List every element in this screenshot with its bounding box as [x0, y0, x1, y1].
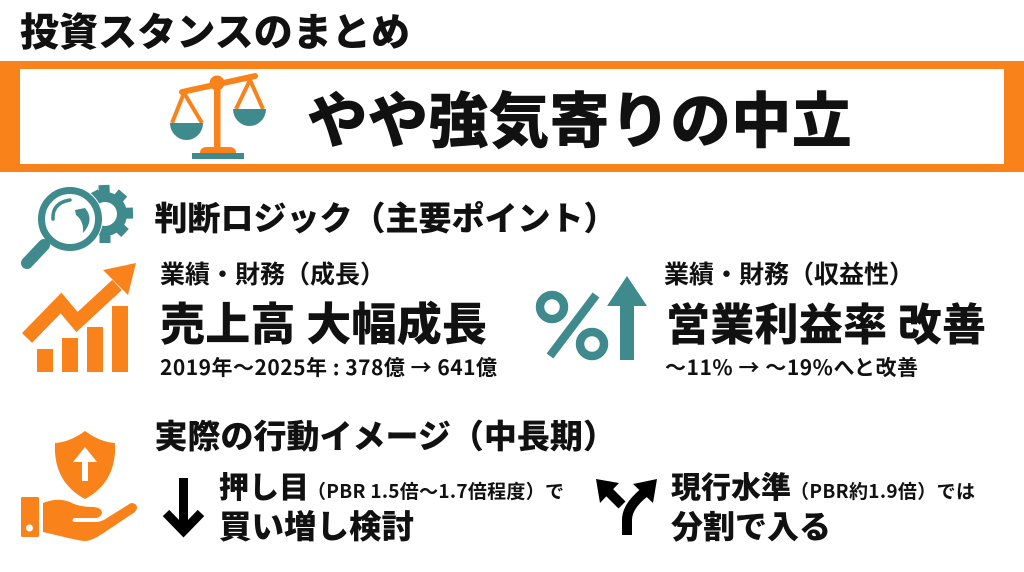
buy text line 1	[219, 463, 564, 507]
growth label: 業績・財務（成長）	[160, 255, 385, 291]
icon: hand holding shield	[21, 431, 137, 541]
panel: profitability	[540, 255, 986, 382]
icon: growth chart	[27, 263, 136, 372]
icon: down arrow	[166, 478, 201, 531]
growth headline: 売上高 大幅成長	[160, 288, 487, 353]
profitability detail: ～11% → ～19%へと改善	[665, 352, 918, 382]
profitability label: 業績・財務（収益性）	[664, 255, 914, 291]
action: split entry	[596, 463, 975, 548]
buy text line 1: （PBR 1.5倍～1.7倍程度）で	[307, 477, 564, 504]
profitability headline: 営業利益率 改善	[666, 289, 986, 353]
icon: forked arrow	[596, 479, 657, 535]
heading: logic: 判断ロジック（主要ポイント）	[154, 192, 616, 240]
buy text line 1: 押し目	[219, 463, 309, 507]
split text line 2: 分割で入る	[671, 502, 831, 548]
split text line 1: 現行水準	[671, 463, 791, 507]
heading: action: 実際の行動イメージ（中長期）	[154, 410, 616, 458]
icon: balance scale	[170, 76, 266, 159]
icon: percent with up arrow	[540, 276, 647, 360]
panel: conclusion banner	[0, 61, 1024, 172]
split text line 1	[671, 463, 975, 507]
banner text: やや強気寄りの中立	[307, 73, 852, 160]
title: 投資スタンスのまとめ	[20, 2, 410, 58]
split text line 1: （PBR約1.9倍）では	[790, 477, 975, 504]
action: buy on dips	[166, 463, 564, 548]
buy text line 2: 買い増し検討	[219, 501, 414, 548]
icon: magnifier and gear	[27, 185, 133, 263]
panel: growth	[27, 255, 497, 382]
growth detail: 2019年～2025年 : 378億 → 641億	[160, 352, 497, 382]
